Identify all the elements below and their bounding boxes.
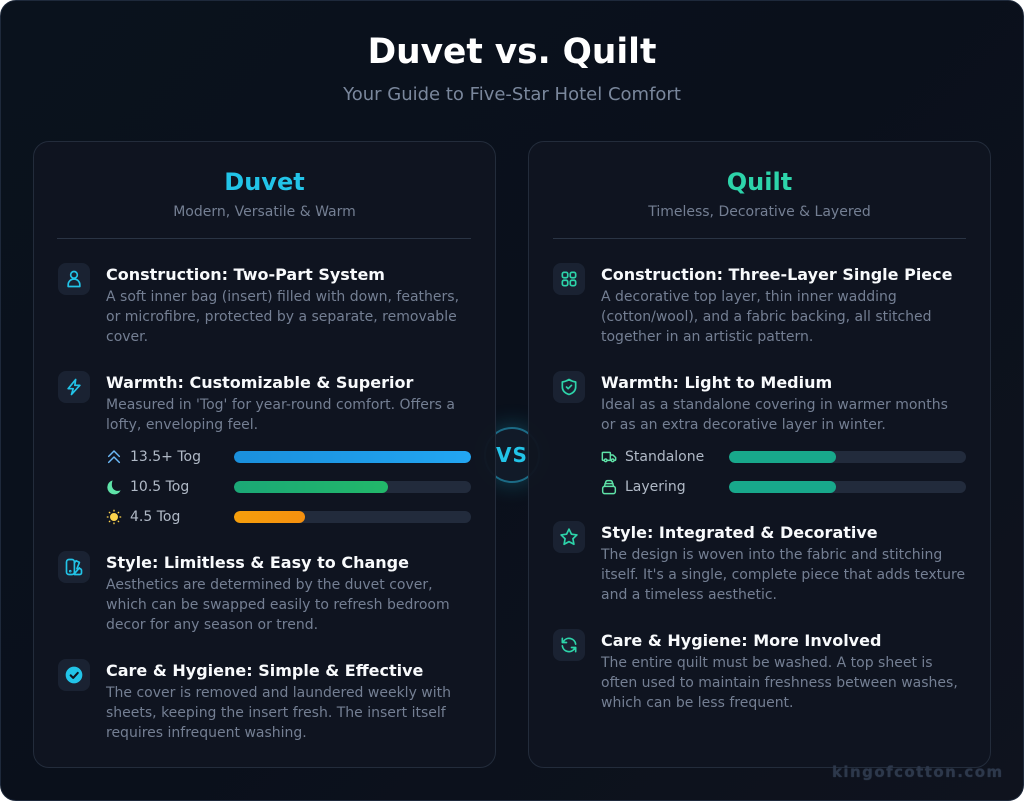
style heading: Style: Limitless & Easy to Change — [106, 553, 409, 572]
quilt tagline: Timeless, Decorative & Layered — [648, 204, 871, 220]
care text: The entire quilt must be washed. A top sheet is — [601, 655, 933, 671]
style text — [106, 577, 450, 633]
warmth heading: Warmth: Customizable & Superior — [106, 373, 413, 392]
subtitle: Your Guide to Five-Star Hotel Comfort — [343, 84, 681, 105]
panel: duvet — [33, 141, 496, 768]
bar: Layering — [729, 481, 966, 493]
icon: double chevron — [108, 450, 120, 464]
construction text — [106, 289, 459, 345]
style text — [600, 547, 965, 603]
vs badge ring — [484, 427, 540, 483]
vs label: VS — [496, 443, 528, 467]
care heading: Care & Hygiene: More Involved — [601, 631, 881, 650]
style text: The design is woven into the fabric and stitching — [601, 547, 942, 563]
title: Duvet vs. Quilt — [368, 32, 656, 72]
icon: star — [553, 521, 585, 553]
style heading: Style: Integrated & Decorative — [601, 523, 878, 542]
icon: sun — [106, 510, 122, 524]
label: Layering: Layering — [625, 479, 686, 495]
warmth text: Ideal as a standalone covering in warmer months — [601, 397, 948, 413]
label: 10.5 Tog: 10.5 Tog — [130, 479, 189, 495]
care text — [600, 655, 958, 711]
icon: grid — [553, 263, 585, 295]
bar: Standalone — [729, 451, 966, 463]
warmth text — [106, 397, 455, 433]
style text: which can be swapped easily to refresh bedroom — [106, 597, 450, 613]
construction text: A soft inner bag (insert) filled with down, feathers, — [106, 289, 459, 305]
label: 13.5+ Tog: 13.5+ Tog — [130, 449, 201, 465]
icon: layers — [602, 480, 616, 494]
warmth text: lofty, enveloping feel. — [106, 417, 258, 433]
icon: truck — [602, 452, 616, 462]
care text — [106, 685, 451, 741]
care heading: Care & Hygiene: Simple & Effective — [106, 661, 423, 680]
panel: quilt — [528, 141, 991, 768]
bar: 13.5+ Tog — [234, 451, 471, 463]
quilt heading: Quilt — [727, 168, 792, 196]
care text: sheets, keeping the insert fresh. The insert itself — [106, 705, 446, 721]
duvet heading: Duvet — [224, 168, 305, 196]
watermark: kingofcotton.com — [832, 763, 1004, 781]
icon: refresh — [553, 629, 585, 661]
icon: moon — [107, 480, 121, 494]
style text: and a timeless aesthetic. — [601, 587, 777, 603]
construction text: together in an artistic pattern. — [601, 329, 813, 345]
style text: itself. It's a single, complete piece that adds texture — [601, 567, 965, 583]
care text: which can be less frequent. — [601, 695, 794, 711]
construction text: cover. — [106, 329, 148, 345]
bar: 10.5 Tog — [234, 481, 471, 493]
icon: swatch — [58, 551, 90, 583]
icon: shield — [553, 371, 585, 403]
construction text — [601, 289, 932, 345]
bar: 4.5 Tog — [234, 511, 471, 523]
construction heading: Construction: Three-Layer Single Piece — [601, 265, 952, 284]
construction text: A decorative top layer, thin inner wadding — [601, 289, 897, 305]
icon: bolt — [58, 371, 90, 403]
label: Standalone: Standalone — [625, 449, 704, 465]
icon: check badge — [58, 659, 90, 691]
duvet tagline: Modern, Versatile & Warm — [173, 204, 356, 220]
label: 4.5 Tog: 4.5 Tog — [130, 509, 180, 525]
care text: requires infrequent washing. — [106, 725, 307, 741]
construction text: or microfibre, protected by a separate, removable — [106, 309, 457, 325]
construction heading: Construction: Two-Part System — [106, 265, 385, 284]
warmth heading: Warmth: Light to Medium — [601, 373, 832, 392]
care text: The cover is removed and laundered weekly with — [106, 685, 451, 701]
care text: often used to maintain freshness between washes, — [601, 675, 958, 691]
icon: person — [58, 263, 90, 295]
warmth text: or as an extra decorative layer in winter. — [601, 417, 886, 433]
warmth text — [601, 397, 948, 433]
construction text: (cotton/wool), and a fabric backing, all stitched — [601, 309, 932, 325]
style text: Aesthetics are determined by the duvet cover, — [106, 577, 433, 593]
style text: decor for any season or trend. — [106, 617, 318, 633]
warmth text: Measured in 'Tog' for year-round comfort. Offers a — [106, 397, 455, 413]
